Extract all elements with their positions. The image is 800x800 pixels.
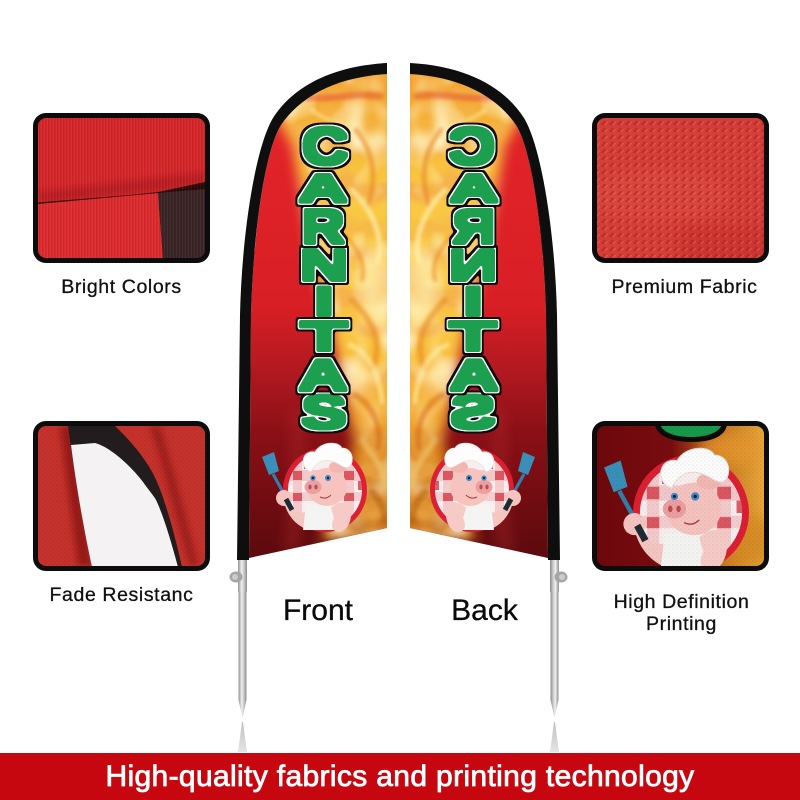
front flag — [230, 60, 400, 752]
back flag pig mascot — [430, 443, 535, 532]
label: high definition printing: High Definition — [614, 591, 749, 613]
back flag word CARNITAS: C — [449, 118, 495, 176]
front flag black sleeve — [237, 63, 387, 560]
front flag word CARNITAS: S — [301, 387, 347, 438]
front flag pole — [230, 558, 247, 752]
back flag word CARNITAS: A — [449, 351, 499, 400]
label: fade resistance: Fade Resistanc — [50, 584, 193, 606]
front flag pig mascot — [262, 443, 367, 532]
panel: high definition printing swatch — [592, 421, 780, 571]
front flag word CARNITAS — [298, 118, 349, 438]
label: back: Back — [451, 594, 519, 627]
label: high definition printing — [614, 591, 749, 635]
green letter fragment — [655, 426, 727, 442]
back flag word CARNITAS: N — [448, 241, 498, 290]
panel: premium fabric swatch — [590, 113, 770, 263]
back flag word CARNITAS: T — [449, 314, 497, 359]
front flag fabric — [249, 74, 387, 558]
panel: fade resistance swatch — [33, 421, 210, 571]
label: premium fabric: Premium Fabric — [611, 276, 758, 298]
label: bright colors: Bright Colors — [61, 276, 182, 298]
back flag — [397, 60, 568, 752]
back flag black sleeve — [410, 63, 560, 560]
front flag word CARNITAS: N — [299, 241, 349, 290]
footer text: High-quality fabrics and printing technology — [105, 760, 695, 793]
back flag word CARNITAS — [448, 118, 499, 438]
pig close-up — [604, 448, 749, 571]
label: high definition printing: Printing — [646, 613, 717, 635]
back flag word CARNITAS: R — [453, 200, 495, 254]
front flag word CARNITAS: R — [302, 200, 344, 254]
back flag pole — [550, 558, 568, 752]
back flag fabric — [410, 74, 548, 558]
back flag word CARNITAS: A — [449, 167, 499, 210]
label: front: Front — [283, 594, 354, 627]
front flag word CARNITAS: I — [313, 280, 335, 324]
front flag word CARNITAS: C — [302, 118, 348, 176]
footer banner — [0, 753, 800, 800]
front flag word CARNITAS: A — [298, 351, 348, 400]
panel: bright colors swatch — [33, 113, 210, 263]
front flag word CARNITAS: T — [300, 314, 348, 359]
back flag word CARNITAS: I — [462, 280, 484, 324]
front flag word CARNITAS: A — [298, 167, 348, 210]
back flag word CARNITAS: S — [450, 387, 496, 438]
